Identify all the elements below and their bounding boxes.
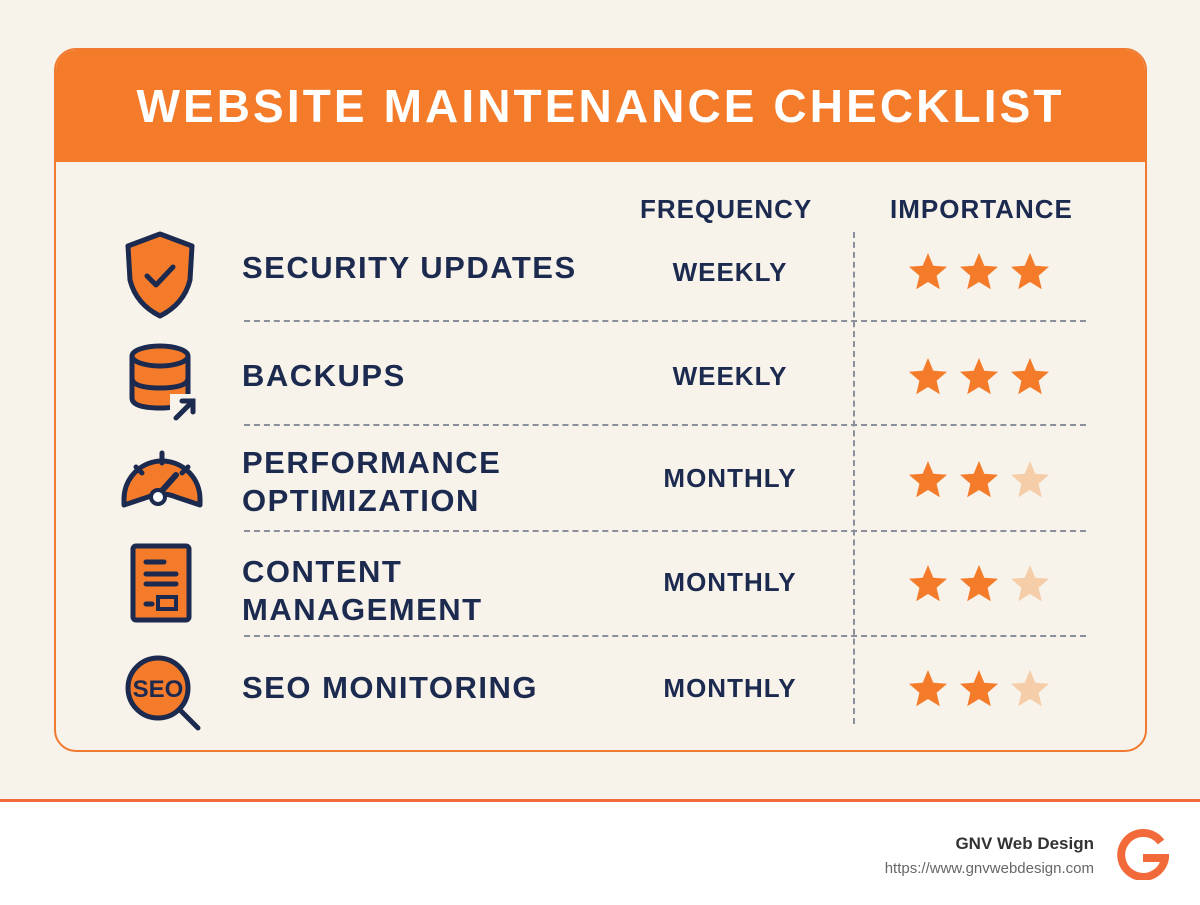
card [54, 48, 1147, 752]
card: MONTHLY [663, 567, 797, 597]
card: WEEKLY [673, 361, 787, 391]
freq: WEEKLY [673, 257, 787, 287]
footer [0, 799, 1200, 905]
header: frequency: FREQUENCY [640, 194, 812, 224]
label: performance optimization: OPTIMIZATION [242, 483, 480, 518]
label: security updates: SECURITY UPDATES [242, 250, 577, 285]
label: seo monitoring: SEO MONITORING [242, 670, 538, 705]
icon: shield [126, 232, 194, 318]
icon: database [130, 344, 196, 420]
label: content management: MANAGEMENT [242, 592, 483, 627]
footer brand text: https://www.gnvwebdesign.com [885, 860, 1094, 877]
stars row1 [909, 253, 1049, 290]
icon: SEO magnifier [126, 656, 200, 730]
header: importance: IMPORTANCE [890, 194, 1073, 224]
logo [1117, 829, 1169, 880]
label: performance optimization [242, 445, 501, 518]
footer brand text: GNV Web Design [955, 834, 1094, 853]
icon: gauge [122, 450, 202, 508]
label: content management [242, 554, 483, 627]
card: MONTHLY [663, 463, 797, 493]
icon: SEO magnifier: SEO [133, 676, 183, 703]
footer brand text [885, 834, 1094, 877]
card: MONTHLY [663, 673, 797, 703]
label: performance optimization: PERFORMANCE [242, 445, 501, 480]
icon: document [130, 544, 192, 622]
label: content management: CONTENT [242, 554, 402, 589]
title: WEBSITE MAINTENANCE CHECKLIST [136, 80, 1065, 132]
label: backups: BACKUPS [242, 358, 406, 393]
title [56, 50, 1145, 162]
